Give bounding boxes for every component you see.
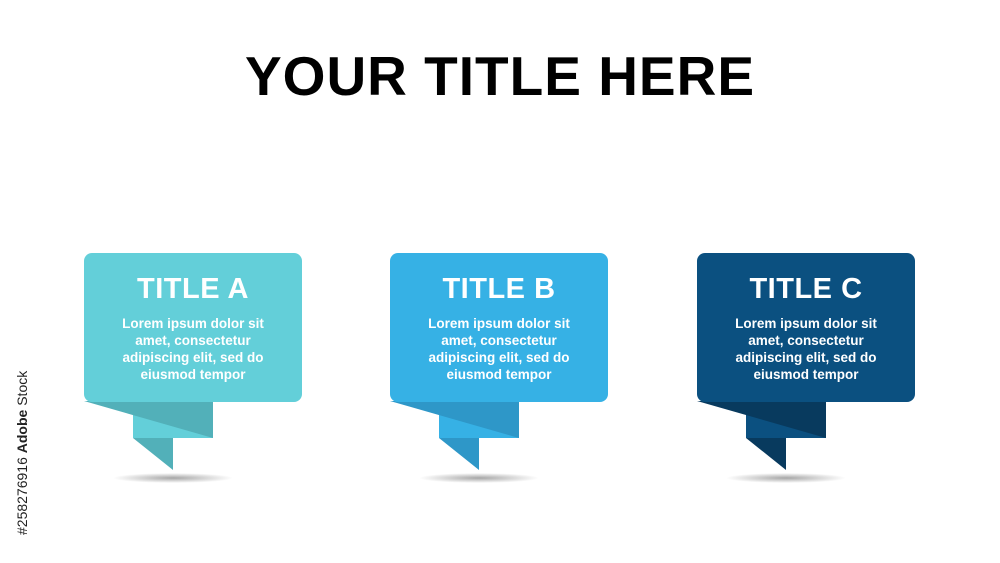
panel: title A: TITLE A [137,273,249,305]
panel: title C: adipiscing elit, sed do [735,350,877,365]
fold A [84,401,227,482]
fold C [697,401,840,482]
side watermark id: #258276916 Adobe Stock [14,371,30,535]
panel: title A [84,253,302,482]
title: YOUR TITLE HERE [245,45,755,107]
panel: title C: TITLE C [749,273,863,305]
panel: title C: Lorem ipsum dolor sit [735,316,877,331]
panel: title A: adipiscing elit, sed do [122,350,264,365]
panel: title B [390,253,608,482]
panel: title C: amet, consectetur [748,333,864,348]
panel: title B: amet, consectetur [441,333,557,348]
panel: title A: Lorem ipsum dolor sit [122,316,264,331]
panel: title B: eiusmod tempor [446,367,552,382]
panel: title A: eiusmod tempor [140,367,246,382]
fold B [390,401,533,482]
panel: title C: eiusmod tempor [753,367,858,382]
panel: title B: adipiscing elit, sed do [428,350,570,365]
panel: title B: Lorem ipsum dolor sit [428,316,570,331]
panel: title A: amet, consectetur [135,333,251,348]
panel: title B: TITLE B [442,273,556,305]
panel: title C [697,253,915,482]
